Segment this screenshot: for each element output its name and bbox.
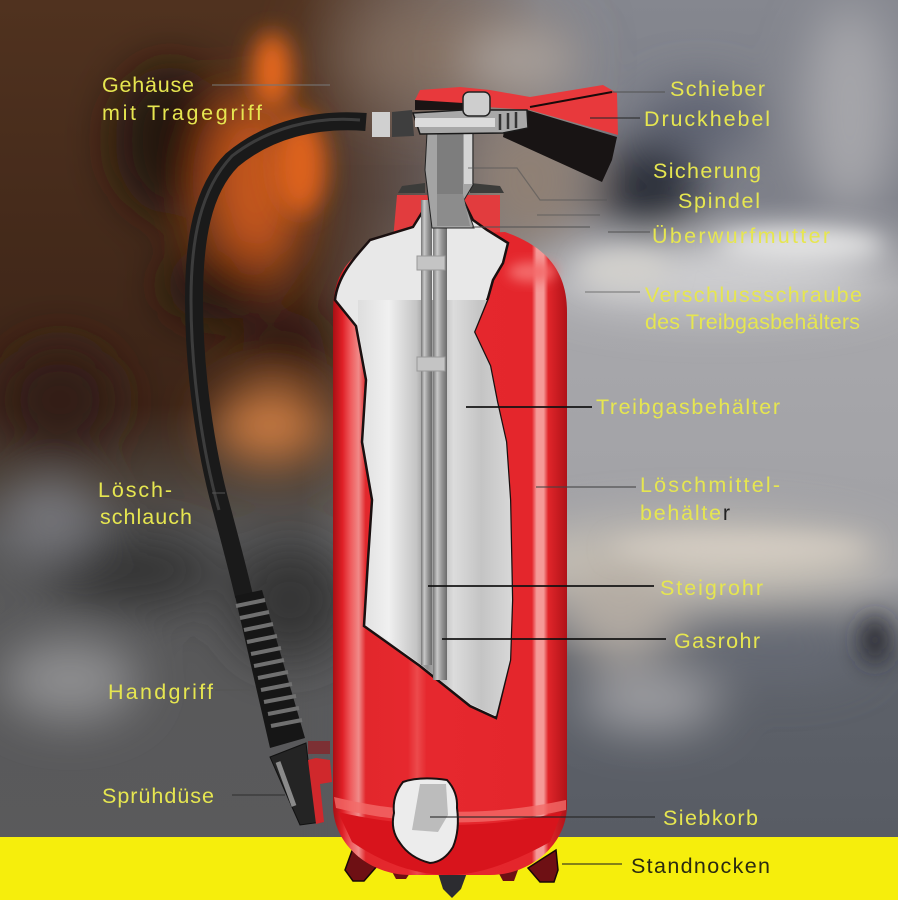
handle and nozzle (235, 590, 332, 825)
label: Überwurfmutter: Überwurfmutter (652, 224, 830, 248)
label: Löschmittelbehälter: Löschmittel- (640, 473, 780, 497)
label: Löschmittelbehälter: behälter (640, 501, 730, 525)
label: Löschschlauch (98, 478, 192, 529)
valve head (413, 110, 528, 134)
leader lines (212, 85, 666, 864)
lower seam (334, 797, 566, 823)
propellant cylinder (silver) (358, 300, 512, 716)
label: Sprühdüse: Sprühdüse (102, 784, 214, 808)
collar ring (398, 183, 504, 193)
label: Steigrohr: Steigrohr (660, 576, 763, 600)
hand lever top (red) (415, 85, 618, 135)
fire extinguisher (333, 85, 618, 898)
label: Verschlussschraube des Treibgasbehälters (645, 283, 862, 334)
label: Löschschlauch: Lösch- (98, 478, 172, 502)
upper shoulder highlight (508, 262, 556, 282)
extinguishing hose (191, 119, 366, 596)
label: Gasrohr: Gasrohr (674, 629, 760, 653)
cutaway white interior (335, 200, 512, 718)
label: Siebkorb: Siebkorb (663, 806, 758, 830)
label: Verschlussschraube des Treibgasbehälters: des Treibgasbehälters (645, 310, 860, 334)
label: Löschmittelbehälter (640, 473, 780, 525)
label: Sicherung: Sicherung (653, 159, 761, 183)
label: Spindel: Spindel (678, 189, 760, 213)
label: Gehäuse mit Tragegriff: Gehäuse (102, 73, 194, 97)
label: Schieber: Schieber (670, 77, 765, 101)
yellow ground strip (0, 837, 898, 900)
label: Verschlussschraube des Treibgasbehälters: Verschlussschraube (645, 283, 862, 307)
label: Löschschlauch: schlauch (100, 505, 192, 529)
sieve basket cutout (393, 778, 458, 863)
valve stem (425, 133, 474, 228)
label: Handgriff: Handgriff (108, 680, 213, 704)
label: Druckhebel: Druckhebel (644, 107, 770, 131)
red cylinder body (333, 232, 567, 875)
label: Standnocken: Standnocken (631, 854, 770, 878)
standing feet (345, 848, 558, 898)
label: Gehäuse mit Tragegriff (102, 73, 262, 125)
hand lever bottom (black) (503, 110, 617, 182)
label: Gehäuse mit Tragegriff: mit Tragegriff (102, 101, 262, 125)
riser tubes (421, 200, 432, 665)
red neck (393, 195, 500, 240)
label: Treibgasbehälter: Treibgasbehälter (596, 395, 780, 419)
